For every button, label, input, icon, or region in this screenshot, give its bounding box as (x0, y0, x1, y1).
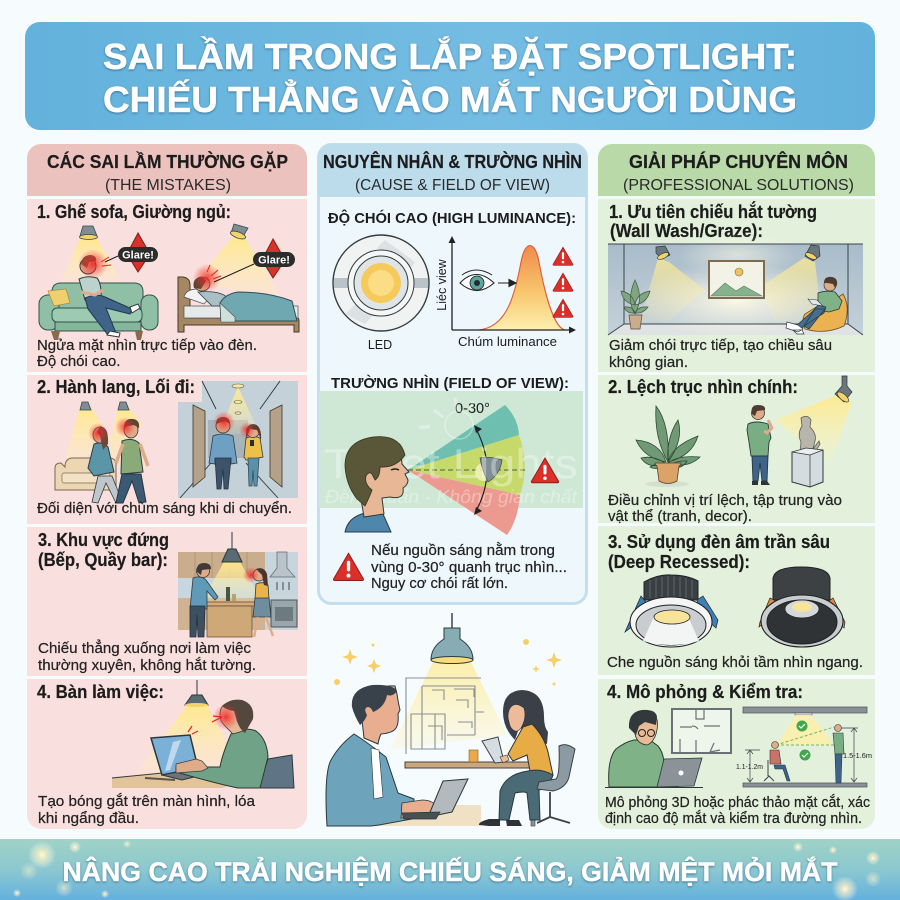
heading: cause: (CAUSE & FIELD OF VIEW) (355, 177, 550, 194)
callout: glare risk: Nguy cơ chói rất lớn. (371, 575, 508, 592)
title banner: SAI LẦM TRONG LẮP ĐẶT SPOTLIGHT: (103, 35, 797, 77)
solution 2 caption: vật thể (tranh, decor). (608, 508, 752, 525)
panel: cause and field of view (318, 144, 587, 604)
glare callout: sofa: Glare! (122, 250, 154, 262)
solution 4 caption: Mô phỏng 3D hoặc phác thảo mặt cắt, xác (605, 794, 870, 811)
person on bean bag (786, 277, 847, 334)
pendant lamp (431, 613, 473, 664)
mistake 3 caption: thường xuyên, không hắt tường. (38, 657, 256, 674)
label: seated eye height: 1.1-1.2m (736, 762, 763, 771)
mistake 4 caption: Tạo bóng gắt trên màn hình, lóa (38, 793, 256, 810)
illustration: person in bed with glare (178, 224, 299, 332)
diagram: field of view (319, 391, 583, 535)
illustration: person on sofa with glare (39, 226, 158, 340)
heading: cause (323, 151, 582, 194)
mistake 1 heading: 1. Ghế sofa, Giường ngủ: (37, 202, 231, 222)
glare callout: bed: Glare! (258, 254, 290, 266)
solution 3 heading: 3. Sử dụng đèn âm trần sâu (608, 532, 830, 552)
solution 1 caption: Giảm chói trực tiếp, tạo chiều sâu (609, 337, 832, 354)
illustration: man designing on laptop (605, 710, 703, 788)
chart: luminance peak (435, 236, 576, 349)
mistake 1 caption: Ngửa mặt nhìn trực tiếp vào đèn. (37, 337, 257, 354)
y axis label: Liéc view (435, 258, 449, 311)
illustration: people walking under spotlights (55, 402, 148, 503)
mistake 3 heading: (Bếp, Quầy bar): (38, 550, 168, 570)
watermark: Tuyet Lights (324, 440, 578, 487)
illustration: desk worker with laptop glare (112, 680, 294, 788)
floor plan (406, 678, 484, 754)
icon: warning (531, 458, 559, 483)
icon: warning triangles (553, 247, 573, 317)
glare callout: sofa (105, 233, 158, 272)
solution 1 heading: 1. Ưu tiên chiếu hắt tường (609, 201, 817, 222)
cup (469, 750, 478, 762)
footer banner: NÂNG CAO TRẢI NGHIỆM CHIẾU SÁNG, GIẢM MỆT MỎI MẮT (62, 855, 838, 887)
mistake 4 caption: khi ngẩng đầu. (38, 810, 139, 827)
subheading: field of view: TRƯỜNG NHÌN (FIELD OF VIEW): (331, 374, 569, 392)
mistake 2 heading: 2. Hành lang, Lối đi: (37, 377, 195, 397)
solution 1 caption: không gian. (609, 354, 688, 371)
woman with tablet (479, 690, 575, 826)
illustration: potted plant (636, 406, 700, 487)
panel: the mistakes (27, 144, 307, 829)
mistake 1 caption: Độ chói cao. (37, 353, 120, 370)
mistake 4 heading: 4. Bàn làm việc: (37, 682, 164, 702)
icon: eye (460, 270, 494, 290)
heading: cause: NGUYÊN NHÂN & TRƯỜNG NHÌN (323, 151, 582, 172)
solution 2 heading: 2. Lệch trục nhìn chính: (608, 377, 798, 397)
heading: mistakes (47, 151, 288, 194)
title banner: CHIẾU THẲNG VÀO MẮT NGƯỜI DÙNG (103, 78, 797, 120)
icon: black deep recessed downlight (759, 567, 845, 647)
illustration: wall wash room (608, 233, 863, 338)
footer banner (0, 839, 900, 900)
illustration: head in profile (345, 437, 409, 532)
label: standing eye height: 1.5-1.6m (843, 751, 872, 760)
mistake 3 heading: 3. Khu vực đứng (38, 530, 169, 550)
subheading: high luminance: ĐỘ CHÓI CAO (HIGH LUMINANCE): (328, 209, 576, 227)
framed picture (709, 261, 764, 298)
callout: glare risk (333, 542, 567, 592)
panel: professional solutions (598, 144, 875, 829)
potted plant (621, 280, 650, 329)
sparkles (334, 639, 562, 686)
illustration: kitchen island (178, 532, 298, 637)
heading: solutions (623, 151, 854, 194)
mistake 2 caption: Đối diện với chùm sáng khi di chuyển. (37, 500, 292, 517)
icon: white recessed downlight (625, 575, 718, 647)
heading: mistakes: CÁC SAI LẦM THƯỜNG GẶP (47, 151, 288, 172)
illustration: man and woman with pendant lamp (326, 613, 575, 826)
glare callout: bed (214, 239, 295, 282)
heading: solutions: GIẢI PHÁP CHUYÊN MÔN (629, 151, 848, 172)
callout: glare risk: vùng 0-30° quanh trục nhìn... (371, 559, 567, 576)
floor plan (672, 709, 731, 753)
solution 3 caption: Che nguồn sáng khỏi tầm nhìn ngang. (607, 654, 863, 671)
solution 2 caption: Điều chỉnh vị trí lệch, tập trung vào (608, 492, 842, 509)
arrow: eye to peak (498, 280, 516, 286)
solution 1 heading: (Wall Wash/Graze): (610, 221, 763, 241)
label: 0-30 degrees: 0-30° (455, 400, 490, 417)
diagram: section view with sightlines (736, 707, 872, 787)
callout: glare risk: Nếu nguồn sáng nằm trong (371, 542, 555, 559)
watermark: Đèn chuẩn - Không gian chất (325, 487, 578, 507)
illustration: person viewing statue under spotlight (747, 376, 852, 487)
x axis label: Chúm luminance (458, 335, 557, 349)
title banner (25, 22, 875, 130)
watermark (324, 398, 578, 507)
table (373, 762, 535, 826)
icon: LED downlight (333, 235, 429, 352)
label: LED: LED (368, 338, 392, 352)
heading: solutions: (PROFESSIONAL SOLUTIONS) (623, 177, 854, 194)
illustration: corridor with ceiling lights (178, 381, 298, 498)
solution 3 heading: (Deep Recessed): (608, 552, 750, 572)
man with laptop (326, 685, 468, 826)
solution 4 heading: 4. Mô phỏng & Kiểm tra: (607, 682, 803, 702)
heading: mistakes: (THE MISTAKES) (105, 177, 231, 194)
mistake 3 caption: Chiếu thẳng xuống nơi làm việc (38, 639, 251, 657)
solution 4 caption: định cao độ mắt và kiểm tra đường nhìn. (605, 810, 862, 827)
